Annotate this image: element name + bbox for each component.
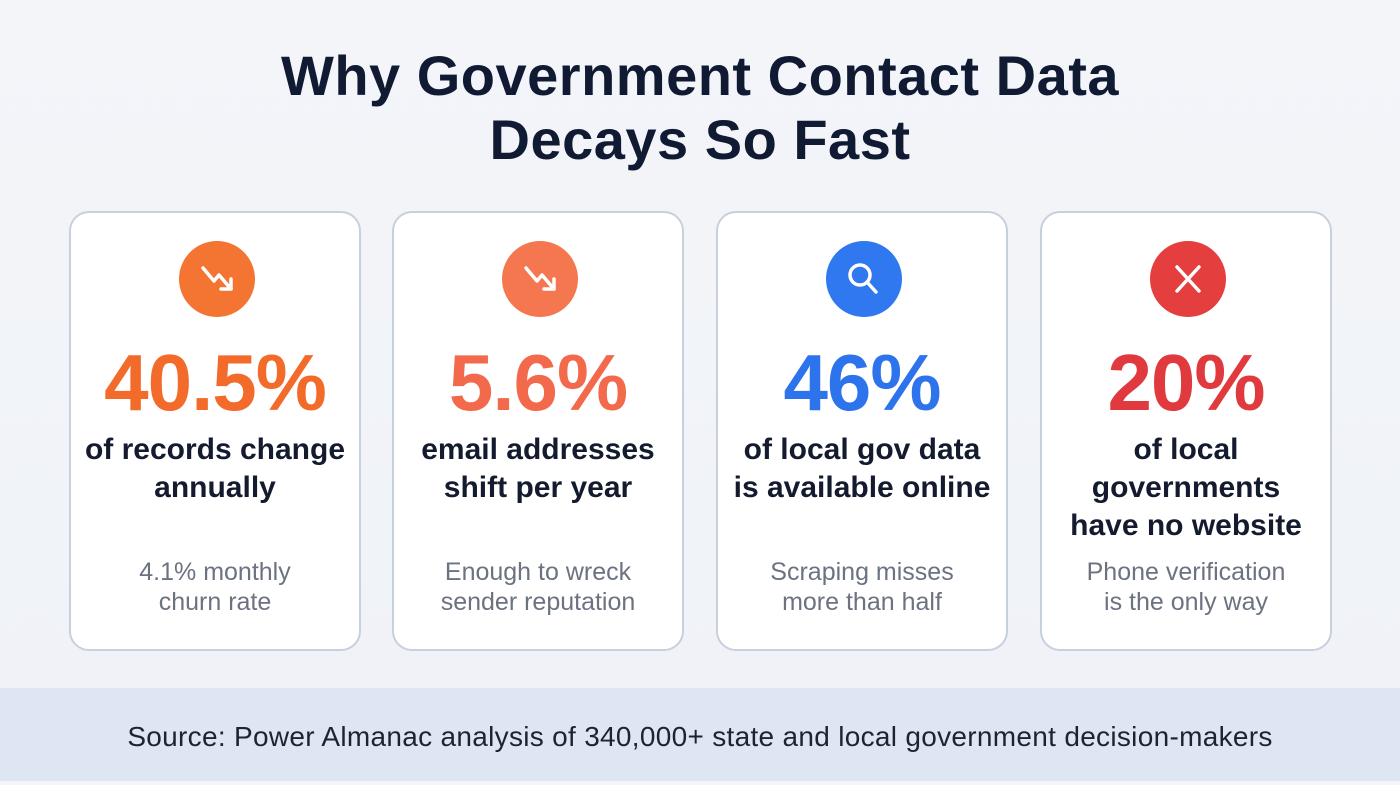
icon: x	[1150, 241, 1226, 317]
stat: 40.5%	[104, 338, 326, 427]
note: Scraping misses	[770, 558, 954, 586]
title: Decays So Fast	[490, 108, 910, 171]
label	[734, 433, 990, 504]
note	[1087, 558, 1285, 616]
label: of local	[1133, 433, 1238, 466]
panel: available online	[716, 211, 1008, 651]
note	[441, 558, 635, 616]
label: is available online	[734, 471, 990, 504]
label	[85, 433, 345, 504]
title: Why Government Contact Data	[281, 44, 1119, 107]
label	[1070, 433, 1302, 542]
note: sender reputation	[441, 588, 635, 616]
note	[139, 558, 291, 616]
label: of records change	[85, 433, 345, 466]
stat: 5.6%	[449, 338, 627, 427]
stat: 46%	[783, 338, 941, 427]
panel: records change	[69, 211, 361, 651]
note: is the only way	[1104, 588, 1268, 616]
label: of local gov data	[744, 433, 980, 466]
label: have no website	[1070, 509, 1302, 542]
icon: magnifier	[826, 241, 902, 317]
panel: email shift	[392, 211, 684, 651]
note	[770, 558, 954, 616]
panel: no website	[1040, 211, 1332, 651]
note: churn rate	[159, 588, 271, 616]
stat: 20%	[1107, 338, 1265, 427]
title	[281, 44, 1119, 171]
label: shift per year	[444, 471, 632, 504]
label: email addresses	[421, 433, 655, 466]
label	[421, 433, 655, 504]
label: annually	[154, 471, 276, 504]
icon: trend down	[502, 241, 578, 317]
label: governments	[1092, 471, 1280, 504]
note: Enough to wreck	[445, 558, 631, 586]
footer source: Source: Power Almanac analysis of 340,000+ state and local government decision-makers	[127, 721, 1273, 752]
note: Phone verification	[1087, 558, 1285, 586]
note: 4.1% monthly	[139, 558, 291, 586]
note: more than half	[782, 588, 942, 616]
icon: trend down	[179, 241, 255, 317]
footer source	[0, 688, 1400, 781]
